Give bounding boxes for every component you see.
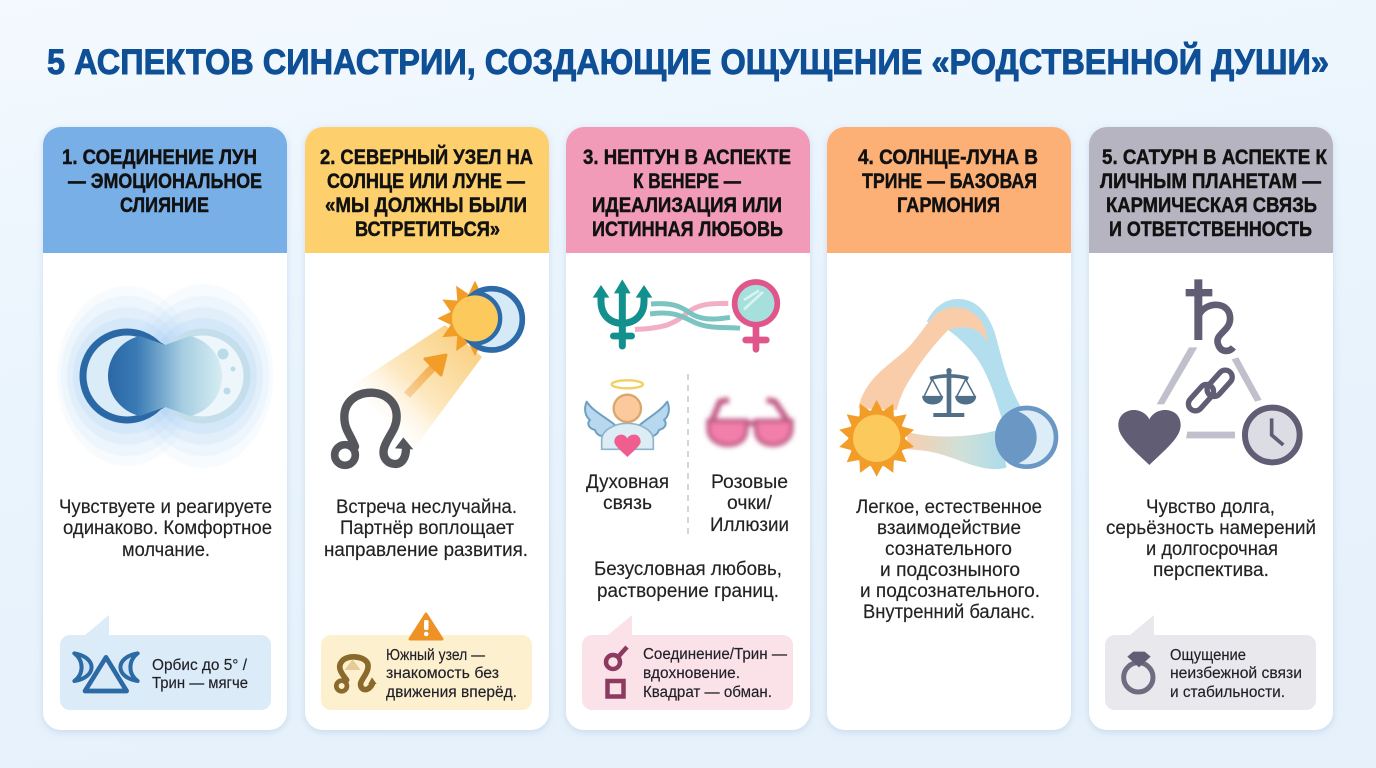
body text: направление развития. [324,540,528,561]
heading: СЛИЯНИЕ [120,194,209,217]
header band [305,127,549,253]
callout [582,615,793,710]
body text: Внутренний баланс. [863,602,1035,623]
icon: rose glasses [708,400,792,445]
heading [320,145,533,241]
icon: chain [1186,367,1235,414]
callout: Соединение/Трин — [643,646,787,663]
card background [566,127,810,730]
label: illusions [710,472,789,536]
body text: молчание. [122,540,210,561]
callout: Трин — мягче [152,675,248,692]
body text: и долгосрочная [1146,539,1278,560]
label: illusions: Розовые [711,472,788,493]
icon: saturn glyph [1186,279,1233,351]
heading [1100,146,1327,241]
heading: ВСТРЕТИТЬСЯ» [355,218,500,241]
body text: Безусловная любовь, [594,559,782,580]
body text: Чувствуете и реагируете [59,497,272,518]
heading [62,146,262,217]
heading: «МЫ ДОЛЖНЫ БЫЛИ [325,194,527,217]
body text: и подсозныного [880,560,1020,581]
panel: 1 moon conjunction [43,127,287,730]
icon: saturn triangle [1118,279,1300,465]
callout [321,614,532,710]
callout [1105,615,1316,710]
body text [856,497,1042,623]
icon: south node [336,657,377,691]
heading: 3. НЕПТУН В АСПЕКТЕ [583,146,791,169]
callout: и стабильности. [1170,684,1285,701]
panel: 5 saturn [1089,127,1333,730]
icon: conjunction and square [606,647,627,696]
heading: ИДЕАЛИЗАЦИЯ ИЛИ [592,194,782,217]
body text [324,497,528,561]
heading [583,146,791,241]
icon: clock [1245,408,1300,462]
body text: растворение границ. [597,581,779,602]
body text [1106,497,1316,581]
heading: И ОТВЕТСТВЕННОСТЬ [1109,218,1312,241]
card background [43,127,287,730]
icon: trine triangle with sun, moon, scales [837,299,1056,477]
card background [305,127,549,730]
body text: одинаково. Комфортное [63,518,272,539]
heading: — ЭМОЦИОНАЛЬНОЕ [68,170,262,193]
heading: КАРМИЧЕСКАЯ СВЯЗЬ [1106,194,1317,217]
panel: 3 neptune venus [566,127,810,730]
callout [60,615,271,710]
icon: ring [1124,652,1153,692]
heading: ЛИЧНЫМ ПЛАНЕТАМ — [1100,170,1321,193]
body text: сознательного [885,539,1012,560]
icon: beam from north node to sun and moon [335,281,522,465]
icon: neptune and venus with ribbons [593,279,777,349]
heading: 2. СЕВЕРНЫЙ УЗЕЛ НА [320,145,533,169]
body text [594,559,782,602]
callout: вдохновение. [643,665,740,682]
body text: Легкое, естественное [856,497,1042,518]
panel: 4 sun moon trine [827,127,1071,730]
heading: 4. СОЛНЦЕ-ЛУНА В [858,146,1038,169]
heading: 5. САТУРН В АСПЕКТЕ К [1102,146,1327,169]
body text: Чувство долга, [1146,497,1275,518]
header band [566,127,810,253]
callout: Орбис до 5° / [152,657,248,674]
icon: warning triangle [410,614,442,639]
icon: moons and trine [74,653,138,691]
icon: merging moons [57,284,273,468]
icon: scales [923,368,975,415]
heading: 1. СОЕДИНЕНИЕ ЛУН [62,146,257,169]
heading [858,146,1038,217]
heading: ИСТИННАЯ ЛЮБОВЬ [592,218,783,241]
label: spiritual: связь [603,493,652,514]
card background [827,127,1071,730]
icon: heart [1118,410,1181,465]
label: spiritual: Духовная [586,472,669,493]
header band [43,127,287,253]
icon: angel [585,380,669,457]
body text [59,497,272,561]
callout: Южный узел — [386,647,485,664]
header band [1089,127,1333,253]
callout: Ощущение [1170,647,1246,664]
heading: ТРИНЕ — БАЗОВАЯ [862,170,1037,193]
label: spiritual [586,472,669,514]
callout: неизбежной связи [1170,665,1302,682]
body text: и подсознательного. [860,581,1040,602]
label: illusions: очки/ [727,493,773,514]
body text: серьёзность намерений [1106,518,1316,539]
body text: Партнёр воплощает [340,518,514,539]
body text: Встреча неслучайна. [336,497,517,518]
callout: знакомость без [386,665,499,682]
card background [1089,127,1333,730]
header band [827,127,1071,253]
panel: 2 north node [305,127,549,730]
body text: взаимодействие [877,518,1021,539]
heading: СОЛНЦЕ ИЛИ ЛУНЕ — [327,170,525,193]
callout: движения вперёд. [386,684,517,701]
label: illusions: Иллюзии [710,515,789,536]
body text: перспектива. [1153,560,1269,581]
heading: К ВЕНЕРЕ — [633,170,741,193]
heading: ГАРМОНИЯ [897,194,1000,217]
callout: Квадрат — обман. [643,684,772,701]
